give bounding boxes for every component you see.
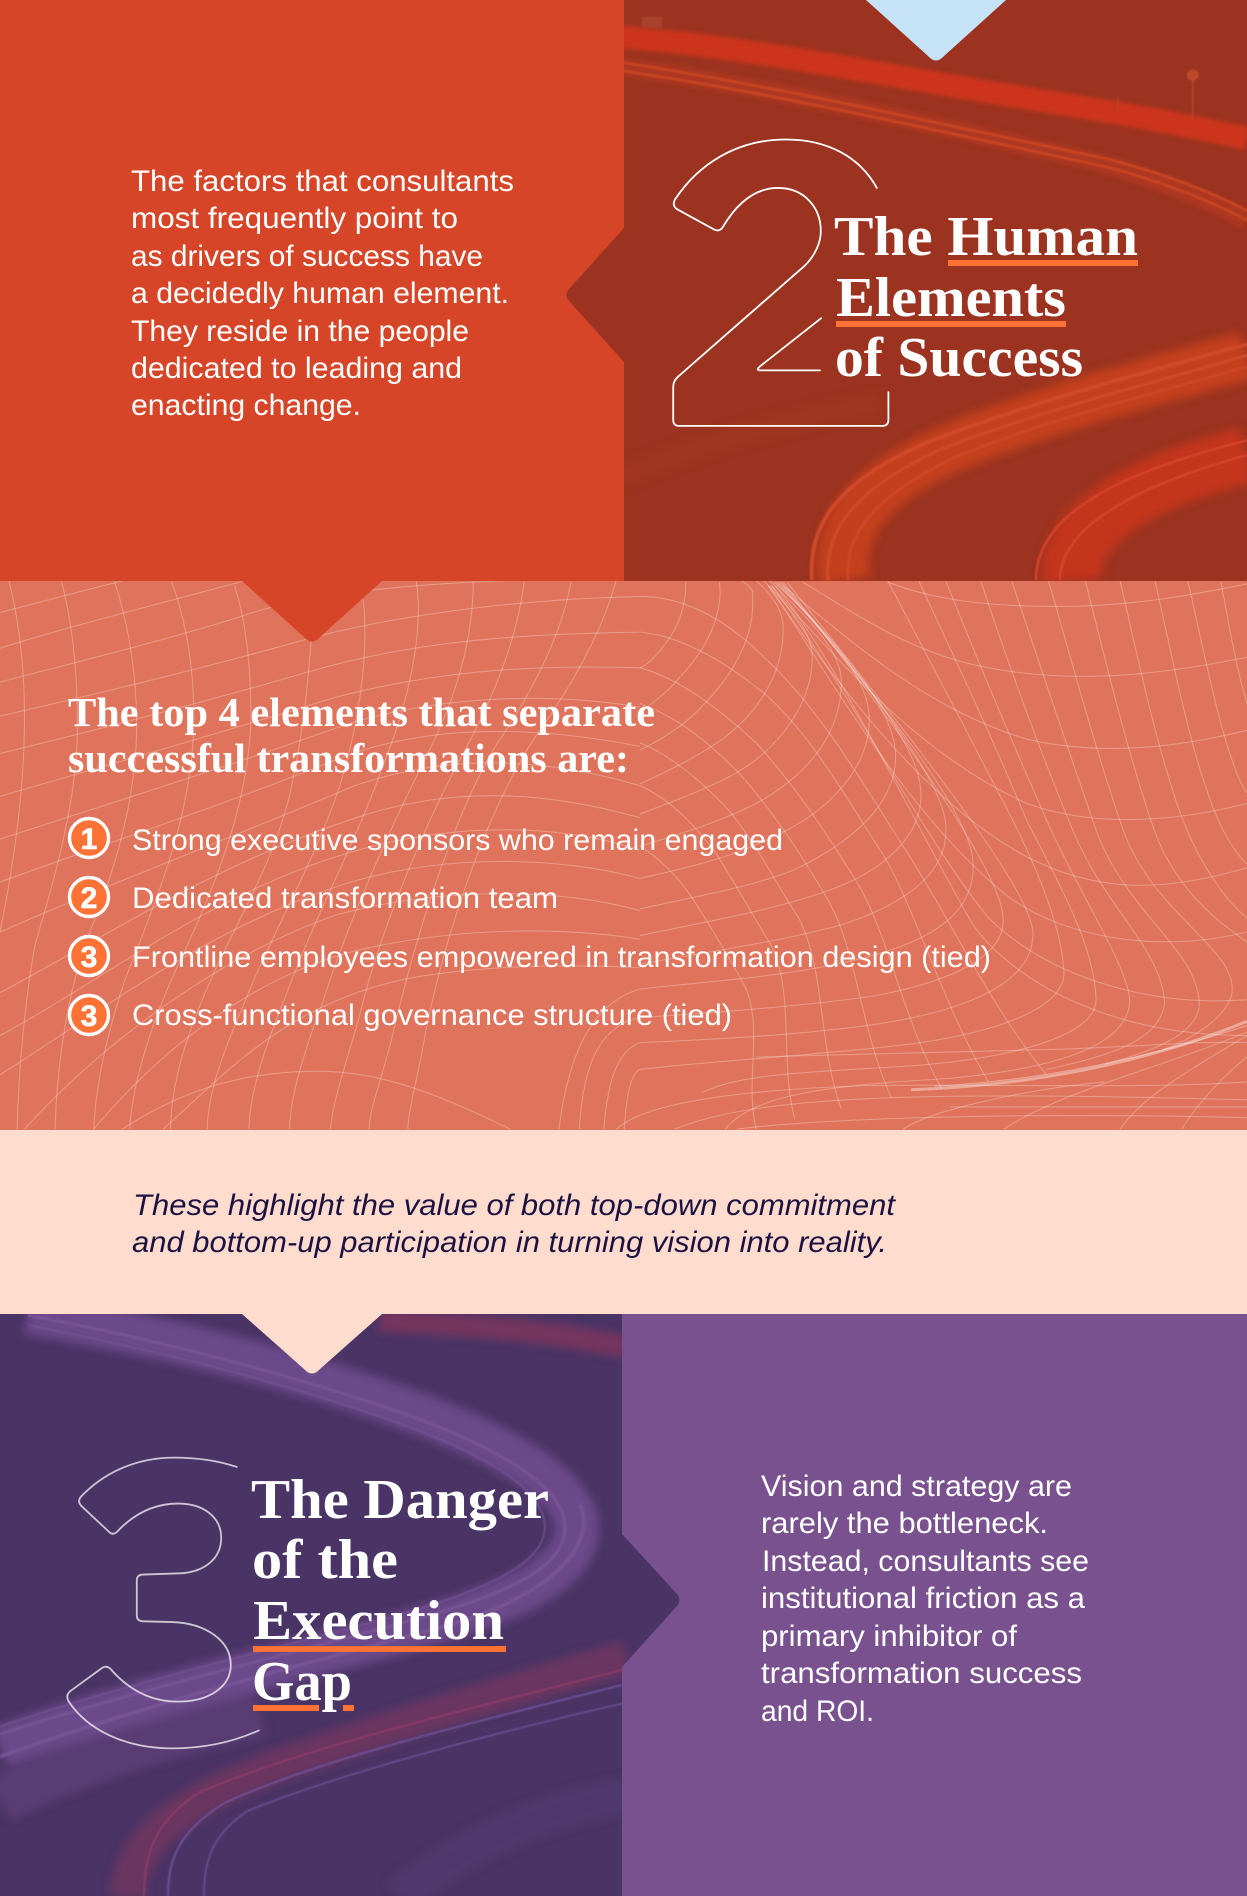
intro paragraph: enacting change. (131, 389, 361, 422)
panel: section 2 title with road photo (560, 0, 1247, 581)
panel: top-left intro (0, 0, 625, 581)
photo: purple light trails (0, 1314, 690, 1896)
list item 4: Cross-functional governance structure (tied) (132, 999, 732, 1032)
section 3 paragraph: primary inhibitor of (761, 1620, 1018, 1653)
list item 2: Dedicated transformation team (132, 882, 558, 915)
intro paragraph (131, 165, 514, 422)
section 3 heading: Gap (252, 1651, 352, 1713)
panel: section 3 right text (622, 1314, 1247, 1896)
mid heading: successful transformations are: (68, 735, 629, 781)
section 3 paragraph: and ROI. (761, 1695, 874, 1728)
intro paragraph: as drivers of success have (131, 240, 483, 273)
numeral 3 outline (67, 1458, 259, 1748)
panel: peach callout (0, 1130, 1247, 1314)
panel: section 3 title with road photo (0, 1314, 690, 1896)
section 2 heading: The Human (834, 206, 1138, 268)
intro paragraph: a decidedly human element. (131, 277, 509, 310)
list item 2 (70, 878, 558, 916)
callout text (132, 1189, 897, 1259)
numeral 2 outline (673, 139, 888, 426)
section 2 heading: of Success (835, 327, 1083, 389)
intro paragraph: The factors that consultants (131, 165, 514, 198)
section 3 paragraph: rarely the bottleneck. (761, 1507, 1048, 1540)
section 3 paragraph: Instead, consultants see (762, 1545, 1089, 1578)
section 2 heading: Elements (836, 267, 1066, 329)
section 3 paragraph (761, 1470, 1089, 1728)
section 3 heading (251, 1469, 549, 1713)
section 3 heading: of the (252, 1529, 398, 1591)
list item 1: 1 (81, 823, 97, 856)
intro paragraph: most frequently point to (131, 202, 458, 235)
pointer: orange (242, 581, 382, 642)
list item 1: Strong executive sponsors who remain engaged (132, 824, 783, 857)
panel: top 4 elements (0, 581, 1247, 1130)
section 3 paragraph: institutional friction as a (761, 1582, 1086, 1615)
pointer: light blue (866, 0, 1006, 60)
callout text: These highlight the value of both top-down commitment (133, 1189, 897, 1222)
photo: red light trails (560, 0, 1247, 581)
section 3 heading: The Danger (251, 1469, 549, 1531)
list item 3: 3 (81, 941, 97, 974)
pointer: peach (242, 1314, 382, 1374)
mesh background (0, 581, 1247, 1129)
callout text: and bottom-up participation in turning vision into reality. (132, 1226, 887, 1259)
intro paragraph: dedicated to leading and (131, 352, 462, 385)
intro paragraph: They reside in the people (131, 315, 469, 348)
list item 4: 3 (81, 1000, 97, 1033)
list item 2: 2 (81, 882, 97, 915)
mid heading (68, 689, 655, 781)
mid heading: The top 4 elements that separate (68, 689, 655, 735)
section 2 heading (834, 206, 1138, 389)
list item 3: Frontline employees empowered in transformation design (tied) (132, 941, 991, 974)
section 3 paragraph: transformation success (761, 1657, 1082, 1690)
section 3 heading: Execution (253, 1590, 504, 1652)
section 3 paragraph: Vision and strategy are (761, 1470, 1072, 1503)
